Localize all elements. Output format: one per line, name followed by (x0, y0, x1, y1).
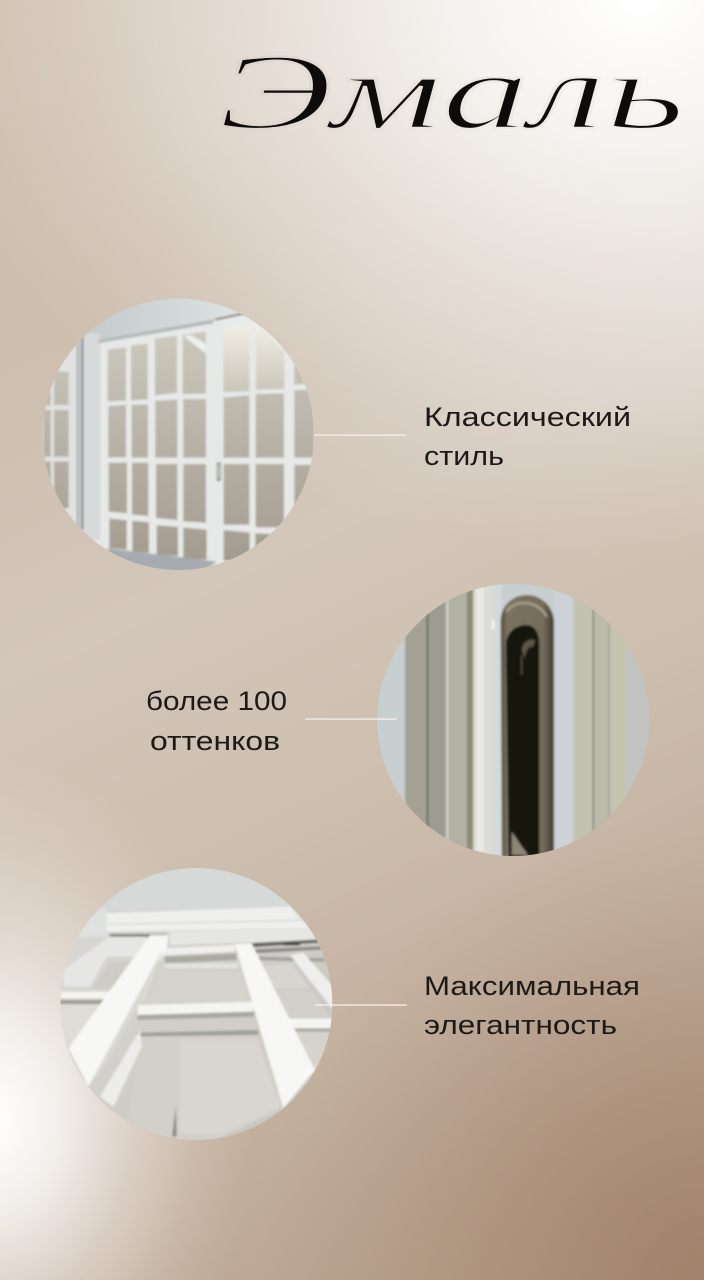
label: maximum elegance: элегантность (424, 1010, 617, 1040)
connector line (315, 1004, 407, 1006)
label: maximum elegance (424, 971, 640, 1040)
label: more than 100 shades: более 100 (146, 686, 287, 716)
connector line (305, 718, 397, 720)
panel: more than 100 shades (146, 575, 660, 865)
label: more than 100 shades (146, 686, 287, 756)
title: Эмаль (218, 33, 685, 152)
panel: classic style (30, 290, 631, 580)
label: classic style: стиль (424, 441, 504, 471)
label: more than 100 shades: оттенков (150, 726, 280, 756)
connector line (314, 434, 406, 436)
label: maximum elegance: Максимальная (424, 971, 640, 1001)
label: classic style (424, 402, 631, 471)
photo: white window frames seen from below (60, 868, 332, 1140)
panel: maximum elegance (50, 860, 640, 1150)
photo: recessed door handle (377, 584, 650, 856)
photo: sliding glazed doors (42, 298, 314, 570)
label: classic style: Классический (424, 402, 631, 432)
